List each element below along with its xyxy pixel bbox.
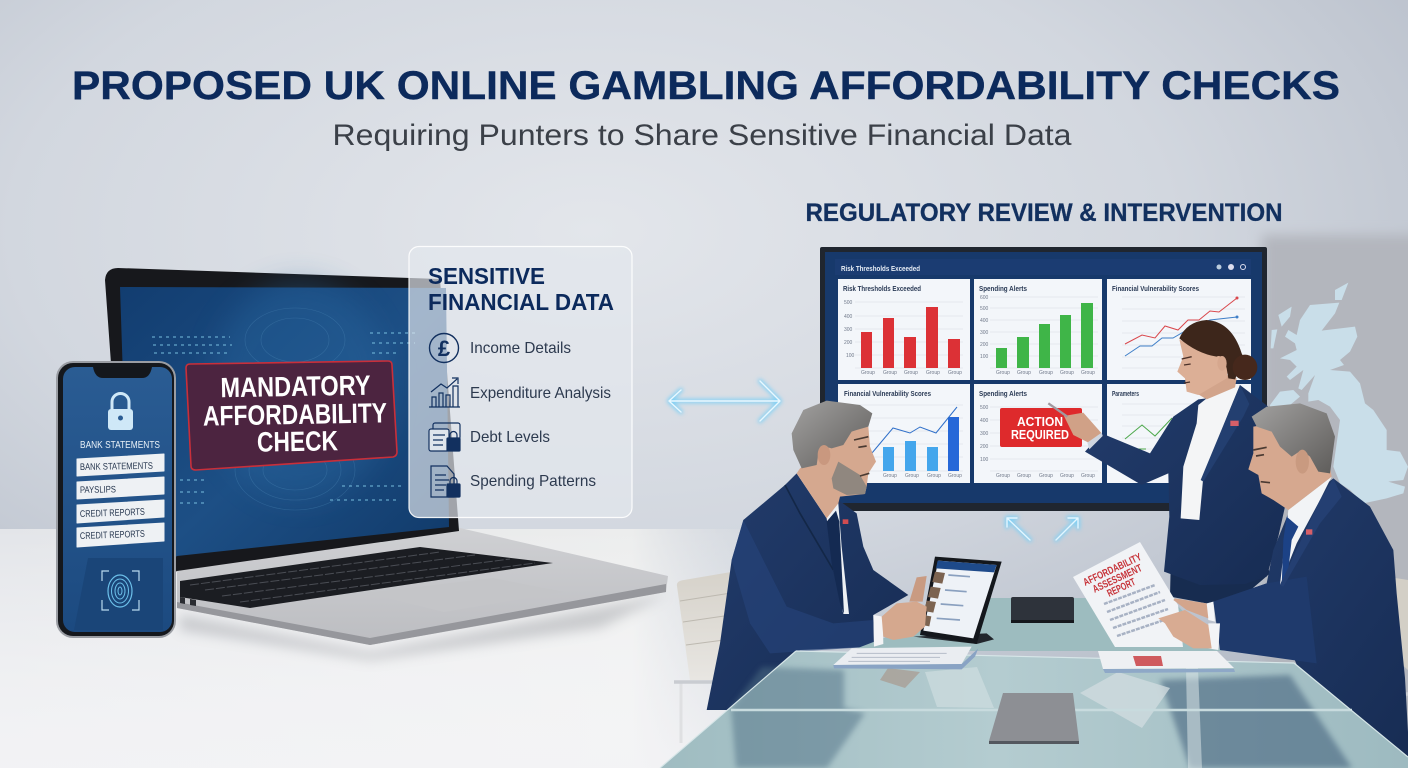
left arm and tablet <box>833 557 1002 669</box>
row: bank statements <box>77 454 164 476</box>
phone heading: BANK STATEMENTS <box>80 440 160 451</box>
chart: financial vulnerability bars: Group <box>927 473 941 479</box>
callout: action required: ACTION <box>1017 415 1063 429</box>
icon: fingerprint <box>74 558 163 630</box>
ear <box>818 445 830 465</box>
chart: spending alerts: 100 <box>980 354 989 360</box>
icon: padlock <box>108 394 133 430</box>
chair: left <box>674 572 760 743</box>
chart: spending alerts: 200 <box>980 342 989 348</box>
pin <box>1230 421 1239 426</box>
chart: spending alerts: Spending Alerts <box>979 284 1027 293</box>
row: bank statements: BANK STATEMENTS <box>80 461 153 473</box>
eye, brow and mouth <box>1253 447 1270 483</box>
bun <box>1233 355 1257 380</box>
icon: spending document lock <box>431 466 460 497</box>
chart: financial vulnerability line <box>1107 279 1251 380</box>
man right head <box>1248 403 1342 587</box>
chart: spending alerts: Group <box>1017 370 1031 376</box>
icon: expenditure chart <box>429 378 460 407</box>
text: spending patterns: Spending Patterns <box>470 473 596 490</box>
chart: spending alerts: 500 <box>980 306 989 312</box>
laptop shadow <box>180 594 668 660</box>
chart: financial vulnerability bars: Group <box>948 473 962 479</box>
hand <box>882 602 927 640</box>
chart: risk thresholds: Group <box>904 370 918 376</box>
chart: spending alerts with action required: 300 <box>980 431 989 437</box>
edge lines <box>731 709 1352 711</box>
report: affordability assessment: ASSESSMENT <box>1091 562 1144 596</box>
jacket <box>1085 385 1285 585</box>
fingerprint watermark <box>235 308 355 510</box>
phone <box>56 361 176 638</box>
hair <box>792 401 872 468</box>
chart: spending alerts with action required: Group <box>1081 473 1095 479</box>
report: affordability assessment: REPORT <box>1105 576 1138 600</box>
chart: spending alerts <box>974 279 1102 380</box>
chair: right <box>1337 578 1408 694</box>
text: income details: Income Details <box>470 340 571 357</box>
laptop lid <box>105 268 459 600</box>
keyboard <box>180 547 553 608</box>
chart: risk thresholds <box>838 279 970 380</box>
notch <box>93 367 152 378</box>
chart: spending alerts: Group <box>996 370 1010 376</box>
chart: parameters: Parameters <box>1112 389 1139 398</box>
icon: pound: £ <box>438 336 451 361</box>
callout: action required: REQUIRED <box>1011 428 1069 442</box>
lapel <box>1201 385 1249 482</box>
chart: risk thresholds: 400 <box>844 314 853 320</box>
screen data lines <box>152 333 415 503</box>
neck and face <box>797 427 876 518</box>
chart: risk thresholds: Risk Thresholds Exceeded <box>843 284 921 293</box>
chart: spending alerts with action required: 100 <box>980 457 989 463</box>
heading: regulatory review: REGULATORY REVIEW & INTERVENTION <box>806 199 1282 227</box>
monitor frame <box>820 247 1267 511</box>
UK map silhouette <box>1270 283 1408 503</box>
chart: financial vulnerability bars <box>838 384 970 483</box>
pin <box>1306 529 1312 535</box>
shirt <box>1280 477 1332 585</box>
chart: spending alerts with action required: Group <box>1039 473 1053 479</box>
right paper on table <box>1098 651 1235 673</box>
ear <box>1296 450 1309 474</box>
chart: spending alerts with action required: 400 <box>980 418 989 424</box>
back cuff <box>1205 602 1215 622</box>
chart: spending alerts: 400 <box>980 318 989 324</box>
hair <box>1179 320 1244 379</box>
report: affordability assessment: AFFORDABILITY <box>1081 551 1144 589</box>
right grey wall panel <box>1262 235 1408 768</box>
laptop <box>105 268 668 660</box>
chart: financial vulnerability bars: Group <box>905 473 919 479</box>
row: payslips: PAYSLIPS <box>80 484 116 496</box>
cuff <box>873 615 883 647</box>
mandatory affordability check badge <box>186 361 397 470</box>
panel heading <box>428 263 614 315</box>
icon: debt documents lock <box>429 423 460 451</box>
reflections <box>731 667 865 768</box>
title: PROPOSED UK ONLINE GAMBLING AFFORDABILITY CHECKS <box>72 64 1340 108</box>
row: credit reports 2: CREDIT REPORTS <box>80 529 145 542</box>
chart: financial vulnerability bars: Group <box>883 473 897 479</box>
chart: spending alerts with action required: 200 <box>980 444 989 450</box>
tablet rows <box>920 572 945 626</box>
phone body <box>56 361 176 638</box>
chart: risk thresholds: Group <box>861 370 875 376</box>
chart: risk thresholds: 200 <box>844 340 853 346</box>
arrows: upward to monitor <box>1007 518 1078 540</box>
mandatory affordability check badge: MANDATORY <box>220 370 371 403</box>
arrow: data exchange <box>669 381 780 421</box>
hand and pen <box>1048 403 1103 449</box>
chart: spending alerts: Group <box>1039 370 1053 376</box>
chart: spending alerts with action required: Spending Alerts <box>979 389 1027 398</box>
panel: sensitive financial data <box>409 246 632 518</box>
hair <box>1252 403 1335 473</box>
tablet screen <box>923 561 997 638</box>
ear <box>1217 356 1227 371</box>
chart: risk thresholds: 300 <box>844 327 853 333</box>
chart: spending alerts: 600 <box>980 295 989 301</box>
row: credit reports: CREDIT REPORTS <box>80 507 145 520</box>
chart: spending alerts: 300 <box>980 330 989 336</box>
neck <box>1197 375 1237 399</box>
chart: risk thresholds: 100 <box>846 353 855 359</box>
slab on table <box>989 693 1079 744</box>
chart: parameters <box>1107 384 1251 483</box>
chart: risk thresholds: Group <box>883 370 897 376</box>
hands on report <box>1158 598 1212 648</box>
fingers behind tablet <box>909 576 927 602</box>
laptop base <box>177 528 668 645</box>
sleeve highlight <box>732 520 873 653</box>
presenter woman <box>1048 320 1285 603</box>
row: credit reports 2 <box>77 523 164 547</box>
chart: spending alerts with action required <box>974 384 1102 483</box>
ports <box>180 597 196 606</box>
laptop screen <box>120 287 449 590</box>
man right body <box>1213 478 1408 768</box>
text: expenditure analysis: Expenditure Analysis <box>470 385 611 402</box>
dashboard header <box>835 259 1251 275</box>
text: debt levels: Debt Levels <box>470 429 550 446</box>
chart: spending alerts with action required: Group <box>1060 473 1074 479</box>
dashboard header: Risk Thresholds Exceeded <box>841 264 920 273</box>
row: credit reports <box>77 500 164 523</box>
row: payslips <box>77 477 164 499</box>
wall monitor dashboard <box>820 247 1267 511</box>
report: affordability assessment <box>1073 542 1183 647</box>
eye and brow <box>854 437 869 476</box>
tablet frame <box>920 557 1002 644</box>
panel heading: SENSITIVE <box>428 263 545 289</box>
shirt <box>797 473 849 614</box>
subtitle: Requiring Punters to Share Sensitive Financial Data <box>332 119 1072 152</box>
chart: risk thresholds: 500 <box>844 300 853 306</box>
mandatory affordability check badge: CHECK <box>257 425 338 458</box>
eye and brow <box>1182 357 1192 383</box>
suit <box>707 473 908 710</box>
tie <box>827 511 844 614</box>
face <box>1177 339 1228 395</box>
chart: spending alerts with action required: Group <box>996 473 1010 479</box>
chart: risk thresholds: Group <box>948 370 962 376</box>
beard <box>832 462 867 495</box>
lapel <box>1280 478 1342 587</box>
phone screen <box>63 367 172 632</box>
chart: spending alerts: Group <box>1060 370 1074 376</box>
man left body <box>707 401 908 710</box>
pin <box>843 519 848 524</box>
chart: financial vulnerability bars: Financial Vulnerability Scores <box>844 389 931 398</box>
lapel line <box>785 485 833 570</box>
device on table <box>1011 597 1074 623</box>
blouse <box>1181 385 1240 520</box>
panel heading: FINANCIAL DATA <box>428 289 614 315</box>
tie <box>1282 517 1298 587</box>
callout: action required <box>1000 408 1082 447</box>
mandatory affordability check badge: AFFORDABILITY <box>203 397 388 432</box>
chart: spending alerts with action required: Group <box>1017 473 1031 479</box>
chart: spending alerts: Group <box>1081 370 1095 376</box>
trackpad <box>366 578 564 612</box>
paper <box>833 647 972 665</box>
table: glass <box>660 598 1408 768</box>
chart: spending alerts with action required: 500 <box>980 405 989 411</box>
tablet stand <box>913 633 994 644</box>
chart: risk thresholds: Group <box>926 370 940 376</box>
desk surface <box>0 529 790 768</box>
icon: pound <box>430 334 458 362</box>
neck and face <box>1248 423 1332 510</box>
trousers <box>1170 523 1270 603</box>
chart: financial vulnerability line: Financial Vulnerability Scores <box>1112 284 1199 293</box>
right sleeve and cuff <box>1205 577 1317 663</box>
